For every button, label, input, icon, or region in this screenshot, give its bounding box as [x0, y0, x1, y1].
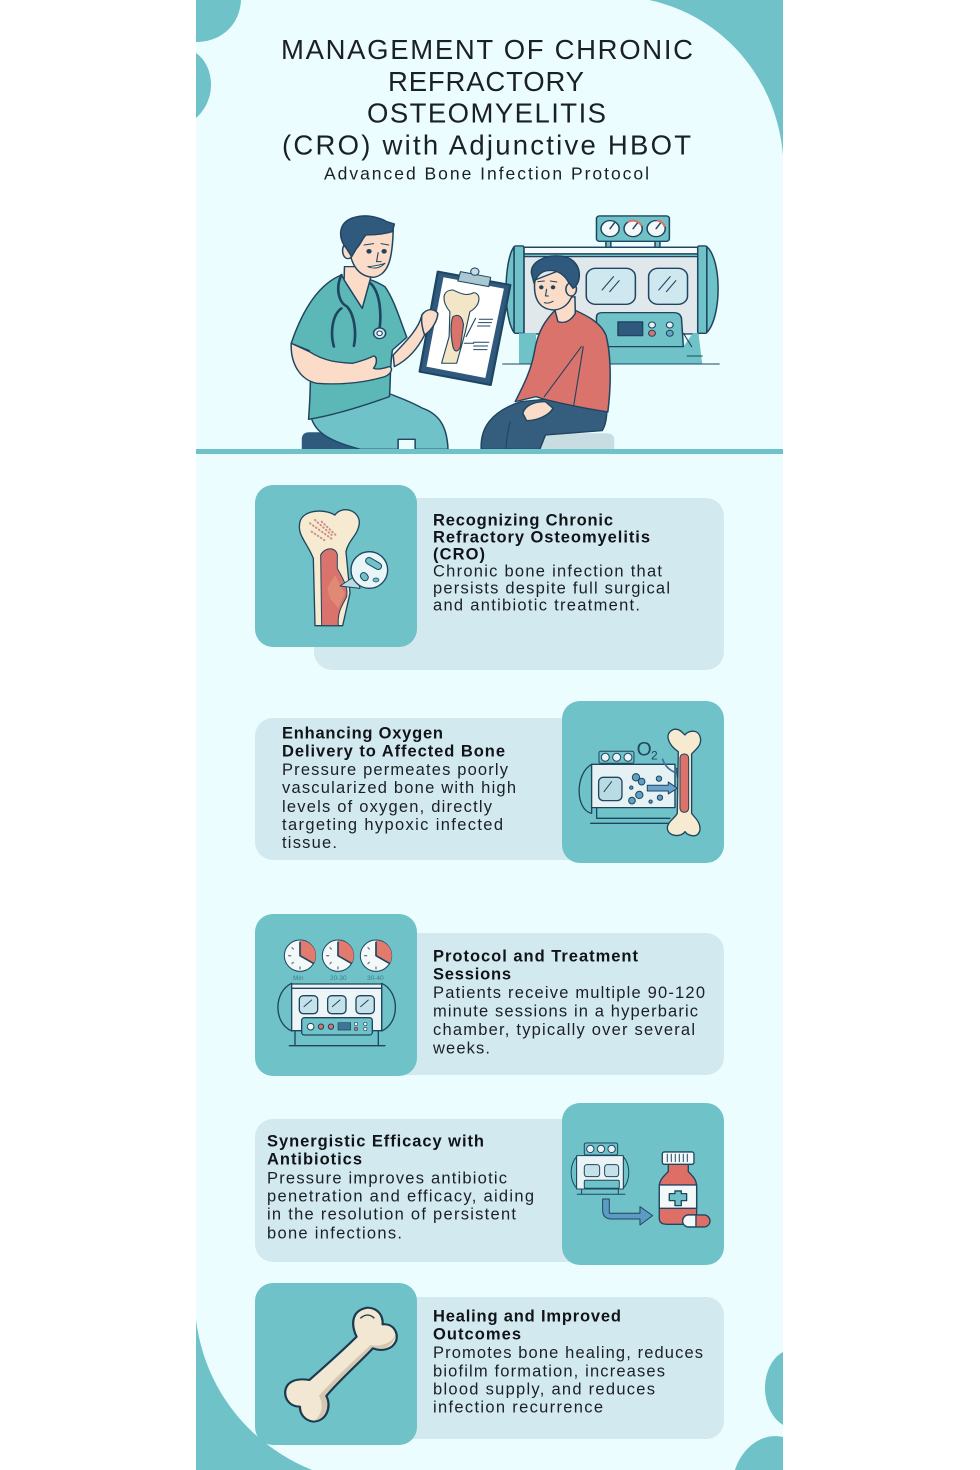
- icon tile with healed bone: [255, 1283, 417, 1445]
- body text: Pressure improves antibiotic: [267, 1170, 507, 1188]
- illustration: doctor showing bone chart to patient by hyperbaric chamber: [291, 216, 719, 449]
- body text: [282, 761, 516, 852]
- icon tile with chamber, oxygen and bone: [562, 701, 724, 863]
- body text: infection recurrence: [433, 1398, 603, 1416]
- body text: levels of oxygen, directly: [282, 798, 493, 816]
- oxygen label: 2: [651, 748, 658, 762]
- title: [281, 34, 693, 160]
- body text: in the resolution of persistent: [267, 1206, 516, 1224]
- body text: [433, 562, 670, 614]
- heading: Refractory Osteomyelitis: [433, 528, 650, 546]
- hyperbaric chamber: [503, 216, 719, 364]
- title: REFRACTORY: [388, 66, 584, 97]
- body text: blood supply, and reduces: [433, 1380, 655, 1398]
- card 4: synergistic efficacy: [255, 1103, 724, 1265]
- body text: Pressure permeates poorly: [282, 761, 509, 779]
- oxygen label: [637, 739, 658, 762]
- heading: Enhancing Oxygen: [282, 724, 443, 742]
- heading: [433, 512, 650, 564]
- heading: Delivery to Affected Bone: [282, 742, 505, 760]
- body text: chamber, typically over several: [433, 1021, 695, 1039]
- body text: persists despite full surgical: [433, 580, 670, 598]
- text panel: [314, 498, 724, 670]
- clock labels: Min: [293, 975, 304, 982]
- heading: Recognizing Chronic: [433, 512, 613, 530]
- heading: Synergistic Efficacy with: [267, 1132, 484, 1150]
- heading: [282, 724, 505, 760]
- heading: [267, 1132, 484, 1168]
- corner shapes: [196, 0, 783, 1470]
- body text: vascularized bone with high: [282, 779, 516, 797]
- heading: [433, 1308, 621, 1344]
- text panel: [340, 1297, 724, 1439]
- icon tile with chamber, arrow and medicine bottle: [562, 1103, 724, 1265]
- heading: Antibiotics: [267, 1150, 362, 1168]
- title: OSTEOMYELITIS: [367, 98, 606, 128]
- body text: weeks.: [432, 1040, 490, 1058]
- clock labels: 20-30: [330, 975, 347, 982]
- clock labels: 30-40: [367, 975, 384, 982]
- body text: tissue.: [282, 834, 337, 852]
- card 5: healing and outcomes: [255, 1283, 724, 1445]
- body text: minute sessions in a hyperbaric: [433, 1002, 698, 1020]
- body text: Chronic bone infection that: [433, 562, 662, 580]
- doctor: [291, 216, 448, 449]
- title: MANAGEMENT OF CHRONIC: [281, 34, 693, 65]
- text panel: [255, 1119, 600, 1262]
- body text: penetration and efficacy, aiding: [267, 1188, 534, 1206]
- divider line: [196, 449, 783, 454]
- body text: targeting hypoxic infected: [282, 816, 503, 834]
- card 1: recognizing CRO: [255, 485, 724, 670]
- body text: bone infections.: [267, 1224, 402, 1242]
- body text: Promotes bone healing, reduces: [433, 1344, 703, 1362]
- text panel: [340, 933, 724, 1075]
- card 2: enhancing oxygen delivery: [255, 701, 724, 863]
- heading: [433, 948, 638, 984]
- title: (CRO) with Adjunctive HBOT: [282, 130, 691, 160]
- heading: Sessions: [433, 966, 511, 984]
- body text: Patients receive multiple 90-120: [433, 984, 705, 1002]
- heading: (CRO): [433, 546, 485, 564]
- patient: [481, 256, 614, 449]
- body text: [267, 1170, 534, 1242]
- icon tile with infected femur: [255, 485, 417, 647]
- clock labels: [293, 975, 384, 982]
- body text: and antibiotic treatment.: [433, 596, 640, 614]
- card 3: protocol and sessions: [255, 914, 724, 1076]
- heading: Protocol and Treatment: [433, 948, 638, 966]
- heading: Healing and Improved: [433, 1308, 621, 1326]
- body text: [433, 1344, 703, 1416]
- oxygen label: O: [637, 739, 652, 760]
- clipboard with bone chart: [420, 268, 510, 385]
- subtitle: Advanced Bone Infection Protocol: [324, 164, 649, 184]
- heading: Outcomes: [433, 1326, 521, 1344]
- text panel: [255, 718, 600, 860]
- body text: [432, 984, 705, 1058]
- body text: biofilm formation, increases: [433, 1362, 665, 1380]
- icon tile with clocks and chamber: [255, 914, 417, 1076]
